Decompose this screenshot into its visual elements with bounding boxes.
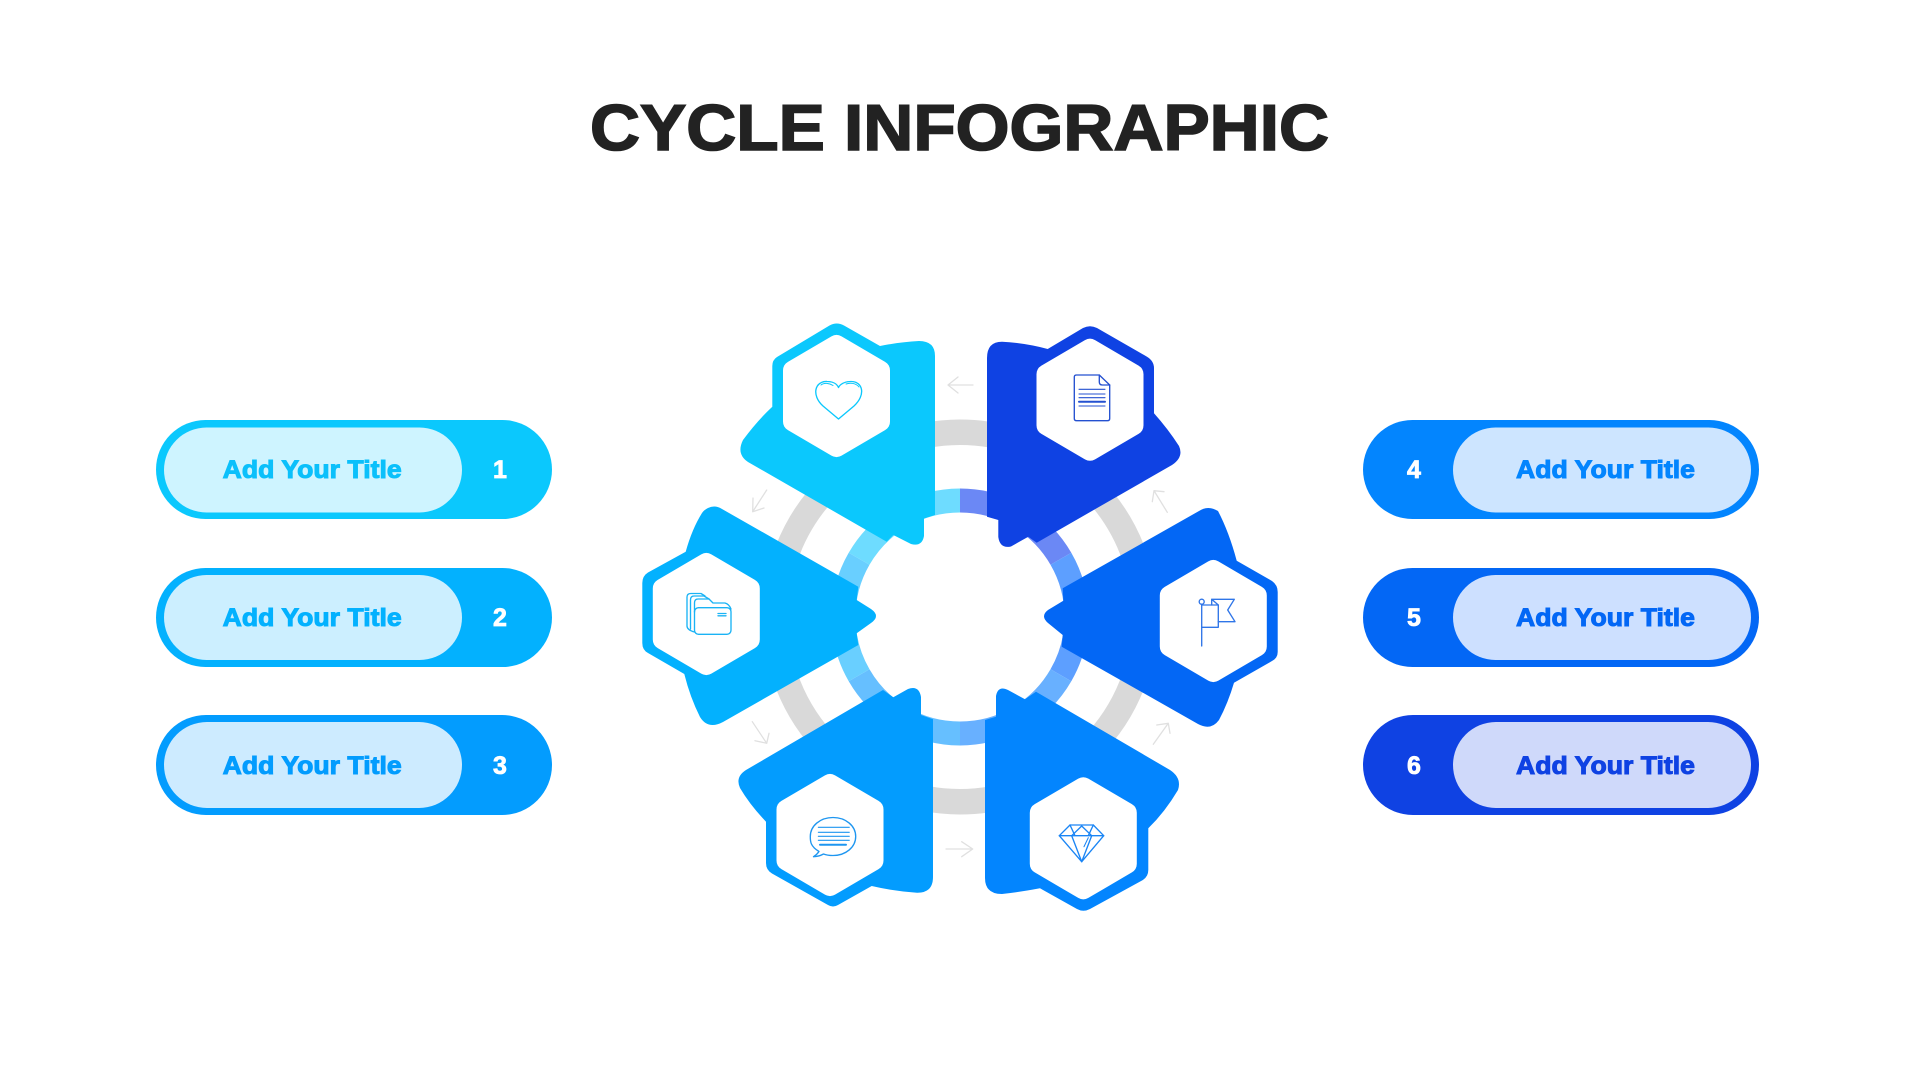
icon: folder xyxy=(687,594,731,634)
title: CYCLE INFOGRAPHIC xyxy=(590,91,1329,164)
segment 3 xyxy=(738,688,933,906)
pill 1: 1 xyxy=(493,456,507,484)
pill 4: 4 xyxy=(1407,456,1421,484)
pill 5: Add Your Title xyxy=(1516,604,1695,632)
pill 1 xyxy=(156,420,552,519)
pill 4: Add Your Title xyxy=(1516,456,1695,484)
pill 3 xyxy=(156,715,552,815)
pill 2: 2 xyxy=(493,604,507,632)
grey outer ring xyxy=(775,432,1145,802)
pill 5: 5 xyxy=(1407,604,1421,632)
pill 6: Add Your Title xyxy=(1516,752,1695,780)
pill 2 xyxy=(156,568,552,667)
icon: document xyxy=(1074,375,1110,421)
pill 3: 3 xyxy=(493,752,507,780)
icon: diamond xyxy=(1059,825,1104,862)
segment 5 xyxy=(1044,508,1278,727)
pill 4 xyxy=(1363,420,1759,519)
pill 6 xyxy=(1363,715,1759,815)
tinted inner ring xyxy=(843,500,1077,734)
arrows between segments xyxy=(752,377,1170,857)
pill 5 xyxy=(1363,568,1759,667)
pill 2: Add Your Title xyxy=(223,604,402,632)
icon: heart xyxy=(816,381,862,419)
segment 6 xyxy=(987,326,1180,547)
segment 4 xyxy=(985,688,1179,911)
pill 3: Add Your Title xyxy=(223,752,402,780)
pill 1: Add Your Title xyxy=(223,456,402,484)
icon: chat bubble xyxy=(810,818,856,857)
segment 2 xyxy=(642,506,876,725)
segment 1 xyxy=(740,324,935,545)
pill 6: 6 xyxy=(1407,752,1421,780)
icon: flag xyxy=(1199,599,1235,646)
